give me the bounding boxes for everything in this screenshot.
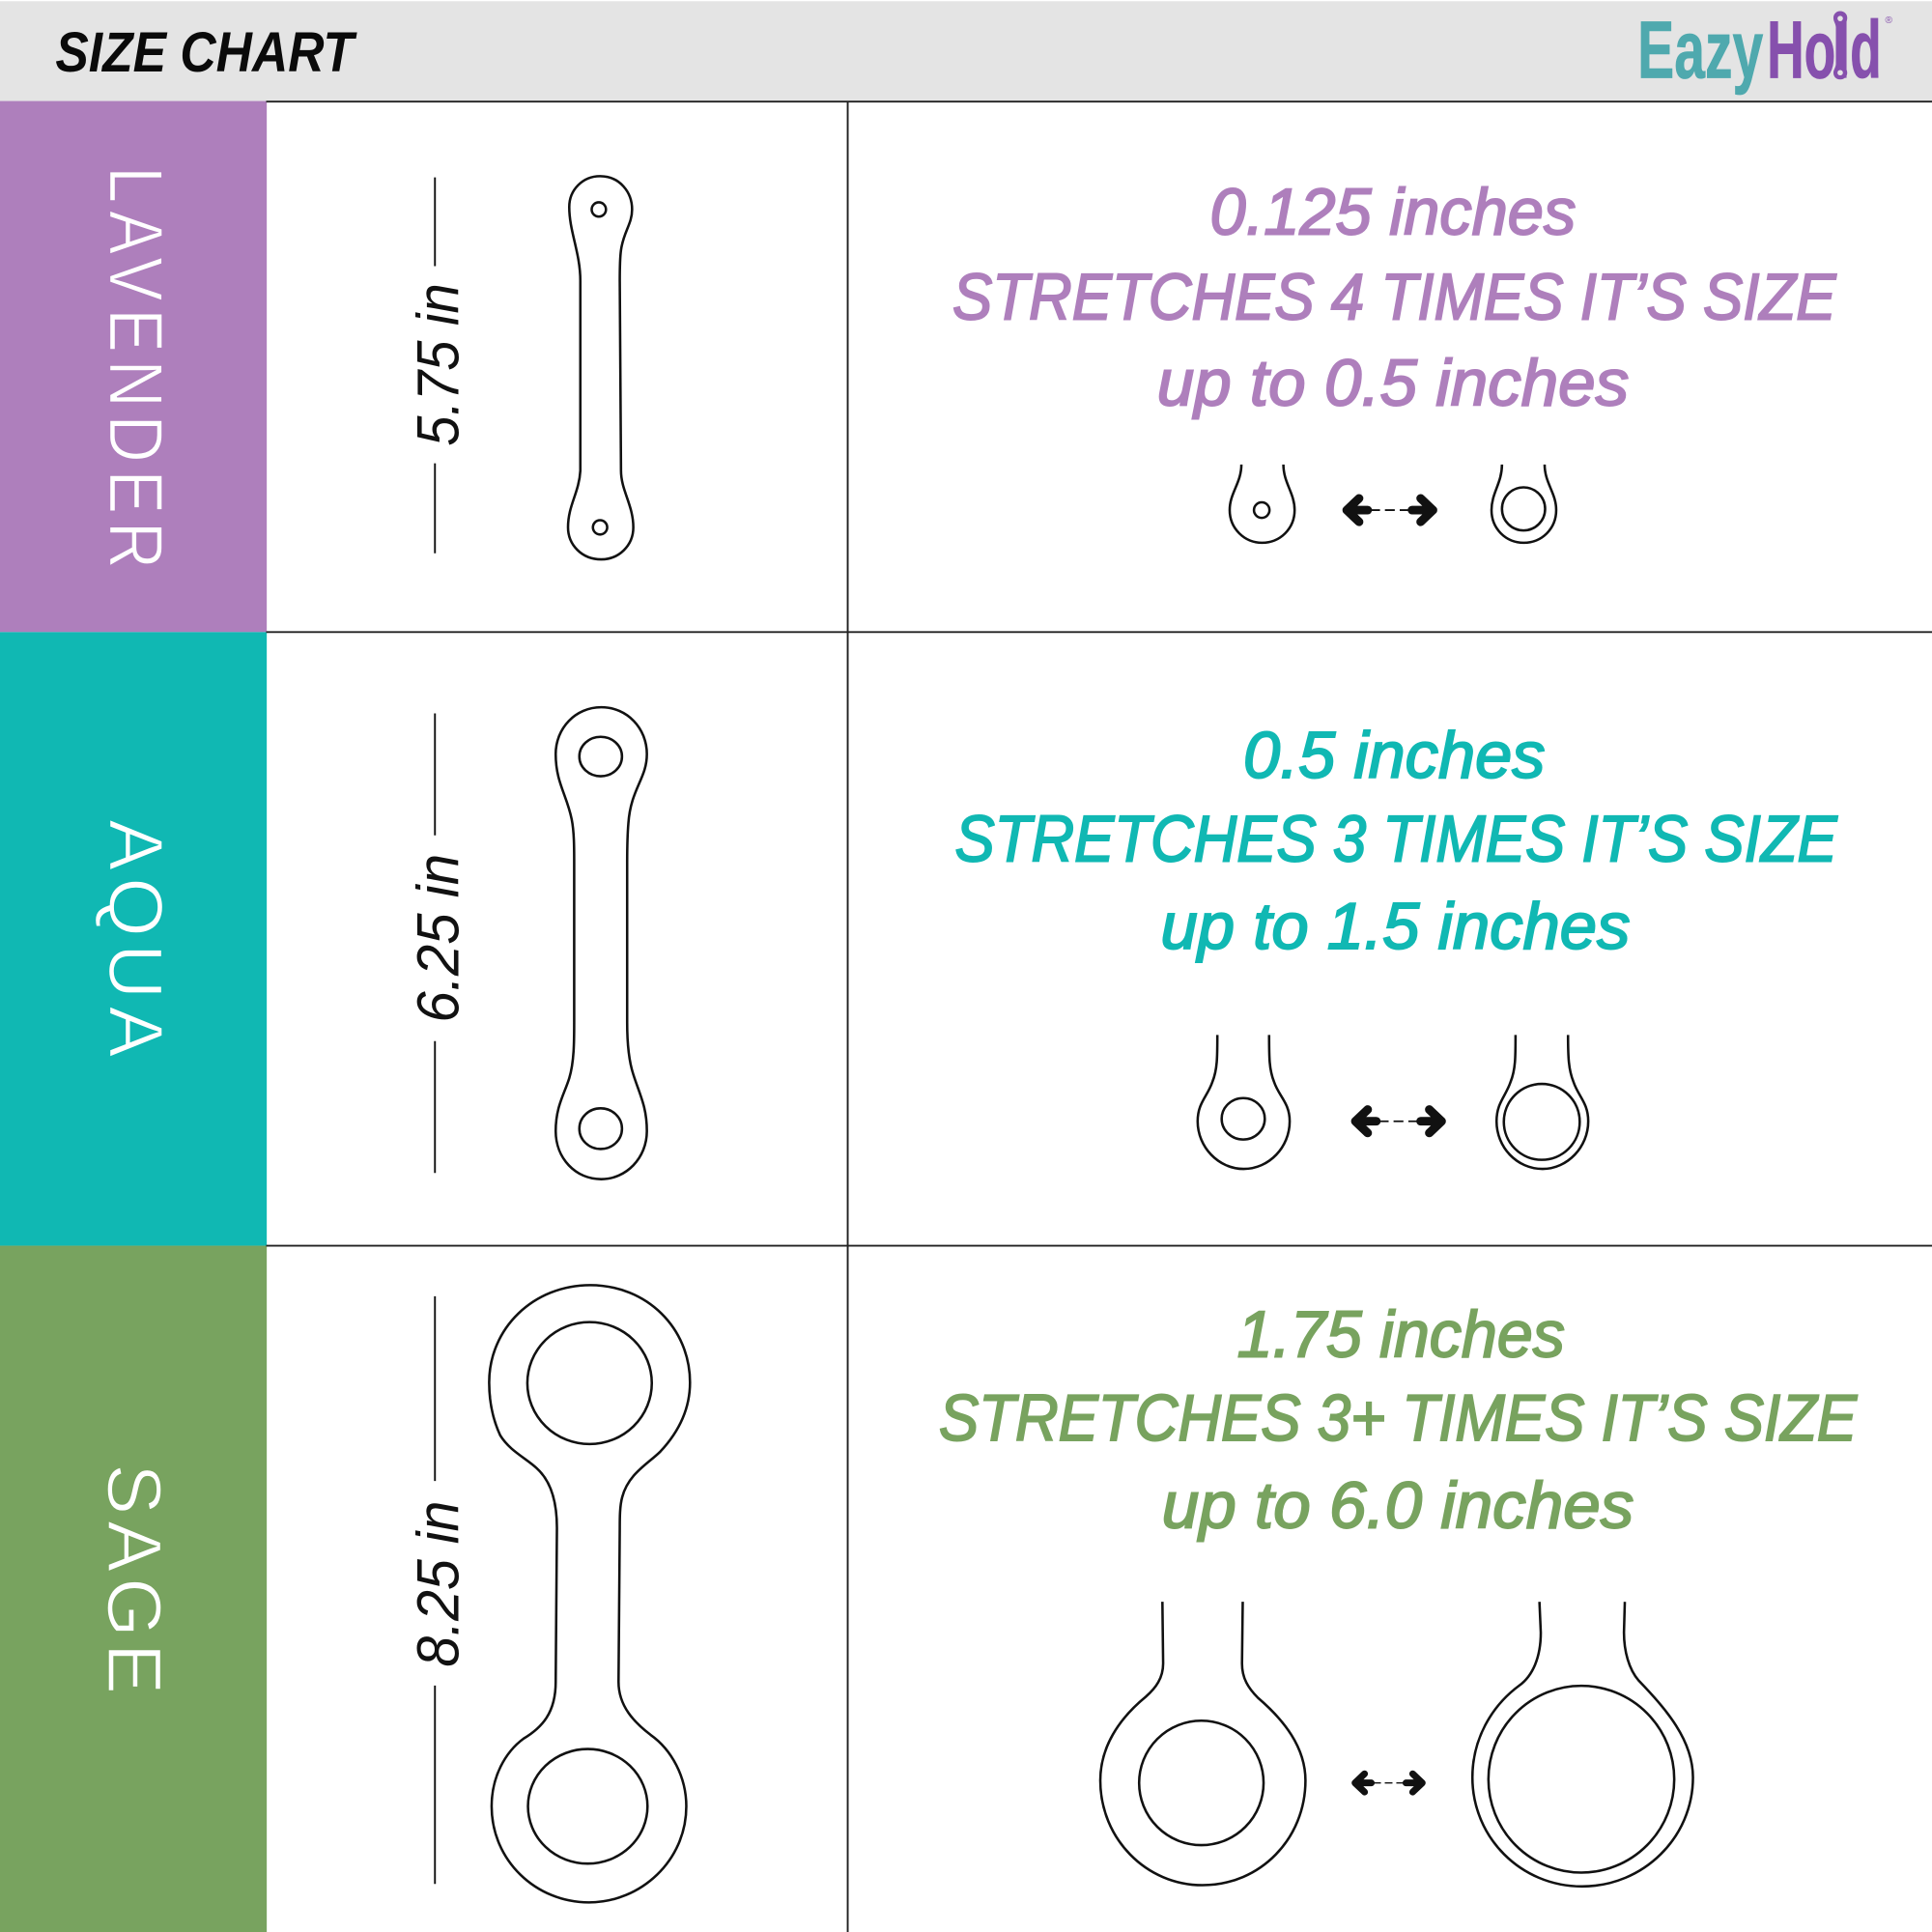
strap outline: lavender bbox=[568, 176, 634, 559]
stretch text: lavender: 0.125 inches bbox=[1210, 176, 1576, 248]
strap outline: sage bbox=[489, 1285, 690, 1902]
panel: sage bbox=[0, 1246, 1858, 1932]
dimension: 6.25 in: 6.25 in bbox=[405, 854, 470, 1023]
logo: ® bbox=[1886, 15, 1893, 26]
color band: sage bbox=[0, 1246, 267, 1932]
stretch text: sage: up to 6.0 inches bbox=[1162, 1470, 1634, 1543]
color band: sage: SAGE bbox=[92, 1463, 178, 1694]
color band: lavender: LAVENDER bbox=[93, 166, 179, 569]
color band: aqua: AQUA bbox=[94, 819, 180, 1058]
strap outline: aqua bbox=[555, 707, 647, 1179]
stretch text: aqua: STRETCHES 3 TIMES IT’S SIZE bbox=[955, 804, 1838, 876]
stretch text: lavender: STRETCHES 4 TIMES IT’S SIZE bbox=[952, 261, 1836, 333]
stretch text: sage bbox=[939, 1298, 1858, 1543]
color band: lavender bbox=[0, 101, 267, 632]
stretch text: lavender bbox=[952, 176, 1836, 420]
stretch diagram: lavender bbox=[1230, 465, 1556, 543]
color band: aqua bbox=[0, 632, 267, 1246]
panel: lavender bbox=[0, 101, 1836, 632]
dimension: 8.25 in: 8.25 in bbox=[405, 1501, 470, 1667]
stretch text: aqua bbox=[955, 720, 1838, 963]
stretch diagram: sage bbox=[1100, 1602, 1693, 1887]
panel: aqua bbox=[0, 632, 1838, 1246]
stretch diagram: aqua bbox=[1198, 1035, 1588, 1169]
stretch text: aqua: up to 1.5 inches bbox=[1161, 891, 1630, 963]
header bar bbox=[0, 1, 1932, 101]
stretch text: lavender: up to 0.5 inches bbox=[1157, 348, 1629, 420]
title: SIZE CHART bbox=[55, 21, 357, 84]
stretch text: aqua: 0.5 inches bbox=[1243, 720, 1545, 792]
logo: Eazy bbox=[1637, 4, 1763, 95]
stretch text: sage: 1.75 inches bbox=[1237, 1298, 1565, 1371]
stretch text: sage: STRETCHES 3+ TIMES IT’S SIZE bbox=[939, 1382, 1858, 1455]
dimension: 5.75 in: 5.75 in bbox=[405, 283, 470, 446]
